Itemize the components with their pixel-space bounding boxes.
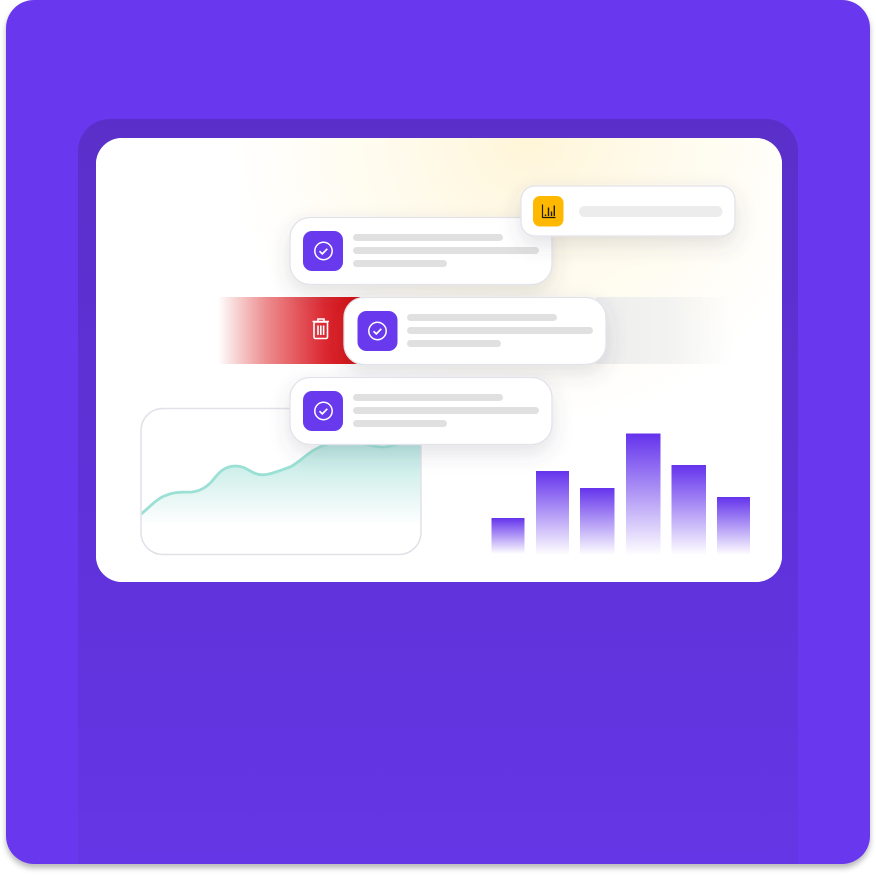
white dashboard panel xyxy=(96,138,782,582)
soft yellow glow xyxy=(96,138,782,582)
text placeholder line xyxy=(579,206,722,217)
swipe band: red delete action xyxy=(218,297,360,364)
chart border xyxy=(141,408,421,554)
text placeholder lines xyxy=(353,234,539,267)
chart line xyxy=(142,445,399,515)
icon: trash can xyxy=(312,319,329,338)
icon: purple check badge xyxy=(303,391,343,431)
task card: swiped middle xyxy=(344,298,606,364)
stat card with yellow icon xyxy=(521,186,735,236)
text placeholder lines xyxy=(353,394,539,427)
chart area fill xyxy=(142,445,420,516)
bar chart xyxy=(492,434,750,556)
inner darker purple frame xyxy=(78,119,798,864)
icon: purple check badge xyxy=(358,311,398,351)
task card: lower xyxy=(290,378,552,444)
text placeholder lines xyxy=(407,314,593,347)
task card: upper xyxy=(290,218,552,284)
icon: yellow chart badge xyxy=(533,196,564,226)
line chart card xyxy=(141,408,421,554)
icon: purple check badge xyxy=(303,231,343,271)
swipe band: grey fade xyxy=(596,297,734,364)
